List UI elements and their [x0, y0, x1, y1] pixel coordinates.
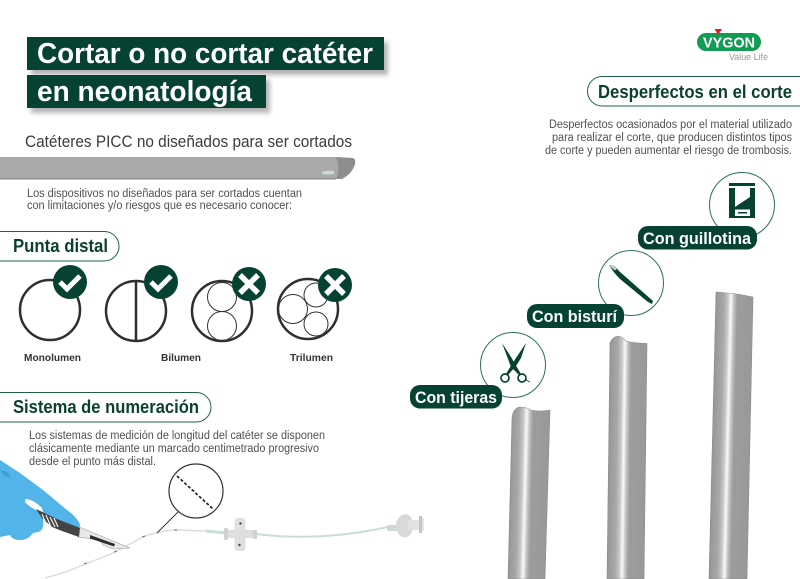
- title: en neonatología: [37, 76, 253, 108]
- text: device limitations: Los dispositivos no diseñados para ser cortados cuentan: [27, 188, 302, 200]
- icon: bilumen: [106, 265, 178, 341]
- icon: three inner lumens, rejected: [278, 268, 352, 339]
- title: [27, 37, 388, 113]
- tube: guillotine cut: [709, 292, 753, 579]
- tube: scalpel cut: [607, 336, 647, 579]
- labels: lumen types: Monolumen: [24, 352, 81, 364]
- tube: scissor cut: [508, 407, 550, 579]
- logo: Vygon: Value Life: [729, 52, 768, 62]
- heading: Sistema de numeración: Sistema de numeración: [13, 397, 199, 417]
- text: cut damage: [545, 119, 792, 157]
- labels: lumen types: [24, 352, 333, 364]
- text: numbering systems: clásicamente mediante un marcado centimetrado progresivo: [29, 443, 319, 455]
- catheter illustration: [0, 157, 355, 180]
- callout: con guillotina: Con guillotina: [643, 229, 752, 248]
- callout: con bisturí: Con bisturí: [532, 307, 618, 326]
- text: cut damage: de corte y pueden aumentar el riesgo de trombosis.: [545, 145, 792, 157]
- heading: Punta distal: Punta distal: [13, 236, 108, 256]
- icon: two inner lumens, rejected: [192, 267, 266, 341]
- illustration: gloved hand with scalpel: [0, 460, 130, 549]
- logo: Vygon: VYGON: [703, 34, 755, 52]
- text: numbering systems: Los sistemas de medición de longitud del catéter se disponen: [29, 430, 325, 442]
- icon: monolumen: [20, 265, 87, 340]
- callout: con tijeras: Con tijeras: [415, 388, 497, 407]
- heading: Desperfectos en el corte: [588, 76, 800, 106]
- heading: Sistema de numeración: [0, 392, 211, 422]
- labels: lumen types: Bilumen: [161, 352, 201, 364]
- text: cut damage: para realizar el corte, que producen distintos tipos: [552, 132, 792, 144]
- logo: Vygon: [697, 29, 768, 62]
- callout: con guillotina: [638, 172, 774, 250]
- text: device limitations: con limitaciones y/o riesgos que es necesario conocer:: [27, 200, 292, 212]
- illustration: catheter line: [45, 514, 424, 578]
- subtitle: PICC catheters: Catéteres PICC no diseñados para ser cortados: [25, 132, 352, 151]
- callout: con tijeras: [410, 332, 546, 408]
- illustration: magnifier with length marks: [157, 464, 223, 533]
- labels: lumen types: Trilumen: [290, 352, 333, 364]
- text: numbering systems: [29, 430, 325, 468]
- text: numbering systems: desde el punto más distal.: [29, 456, 156, 468]
- text: cut damage: Desperfectos ocasionados por el material utilizado: [549, 119, 792, 131]
- title: Cortar o no cortar catéter: [37, 38, 373, 70]
- callout: con bisturí: [527, 250, 664, 328]
- text: device limitations: [27, 188, 302, 212]
- heading: Punta distal: [0, 232, 119, 261]
